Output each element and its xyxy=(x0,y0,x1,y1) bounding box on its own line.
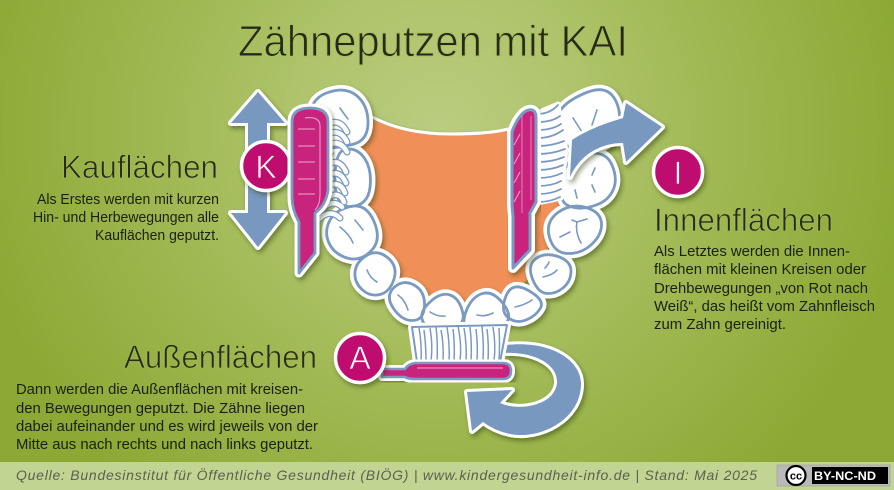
palate xyxy=(345,114,560,320)
section: Innenflächen: zum Zahn gereinigt. xyxy=(654,317,786,333)
section: Innenflächen: Drehbewegungen „von Rot nach xyxy=(654,281,868,297)
section: Außenflächen: dabei aufeinander und es wird jeweils von der xyxy=(16,419,318,435)
section: Kauflächen: Als Erstes werden mit kurzen xyxy=(37,192,219,208)
section: Außenflächen xyxy=(16,339,318,453)
section: Innenflächen: Weiß“, das heißt vom Zahnfleisch xyxy=(654,299,875,315)
section: Kauflächen: Kauflächen geputzt. xyxy=(95,228,219,244)
badge I: I xyxy=(674,155,682,191)
section: Außenflächen: Mitte aus nach rechts und nach links geputzt. xyxy=(16,437,313,453)
CC license badge xyxy=(777,465,890,486)
arrow: inner surfaces xyxy=(570,103,662,177)
badge A: A xyxy=(349,340,371,376)
left bristles xyxy=(318,122,347,220)
section: Außenflächen: Dann werden die Außenflächen mit kreisen- xyxy=(16,382,303,398)
right bristles xyxy=(537,104,566,203)
title: Zähneputzen mit KAI xyxy=(238,17,628,66)
section: Innenflächen xyxy=(654,202,875,333)
section: Außenflächen: den Bewegungen geputzt. Die Zähne liegen xyxy=(16,401,305,417)
CC license badge: BY-NC-ND xyxy=(814,469,876,483)
footer band: Quelle: Bundesinstitut für Öffentliche Gesundheit (BIÖG) | www.kindergesundheit-info.de | Stand: Mai 2025 xyxy=(16,466,757,483)
section: Außenflächen: Außenflächen xyxy=(124,339,317,375)
CC license badge: cc xyxy=(790,470,802,482)
footer band xyxy=(0,462,894,490)
section: Innenflächen: Als Letztes werden die Innen- xyxy=(654,244,850,260)
arrow: up and down xyxy=(231,92,285,247)
section: Kauflächen: Hin- und Herbewegungen alle xyxy=(33,210,219,226)
right toothbrush xyxy=(512,104,566,268)
badge K xyxy=(242,142,290,190)
bottom bristles xyxy=(412,325,507,362)
section: Kauflächen xyxy=(33,149,219,244)
badge A xyxy=(336,334,384,382)
section: Innenflächen: Innenflächen xyxy=(654,202,833,238)
arrow: rotation xyxy=(467,344,581,435)
badge I xyxy=(654,148,702,196)
section: Kauflächen: Kauflächen xyxy=(61,149,218,185)
badge K: K xyxy=(255,149,277,185)
bottom toothbrush xyxy=(382,325,511,379)
teeth xyxy=(310,90,620,329)
left toothbrush xyxy=(292,108,347,273)
section: Innenflächen: flächen mit kleinen Kreisen oder xyxy=(654,262,866,278)
